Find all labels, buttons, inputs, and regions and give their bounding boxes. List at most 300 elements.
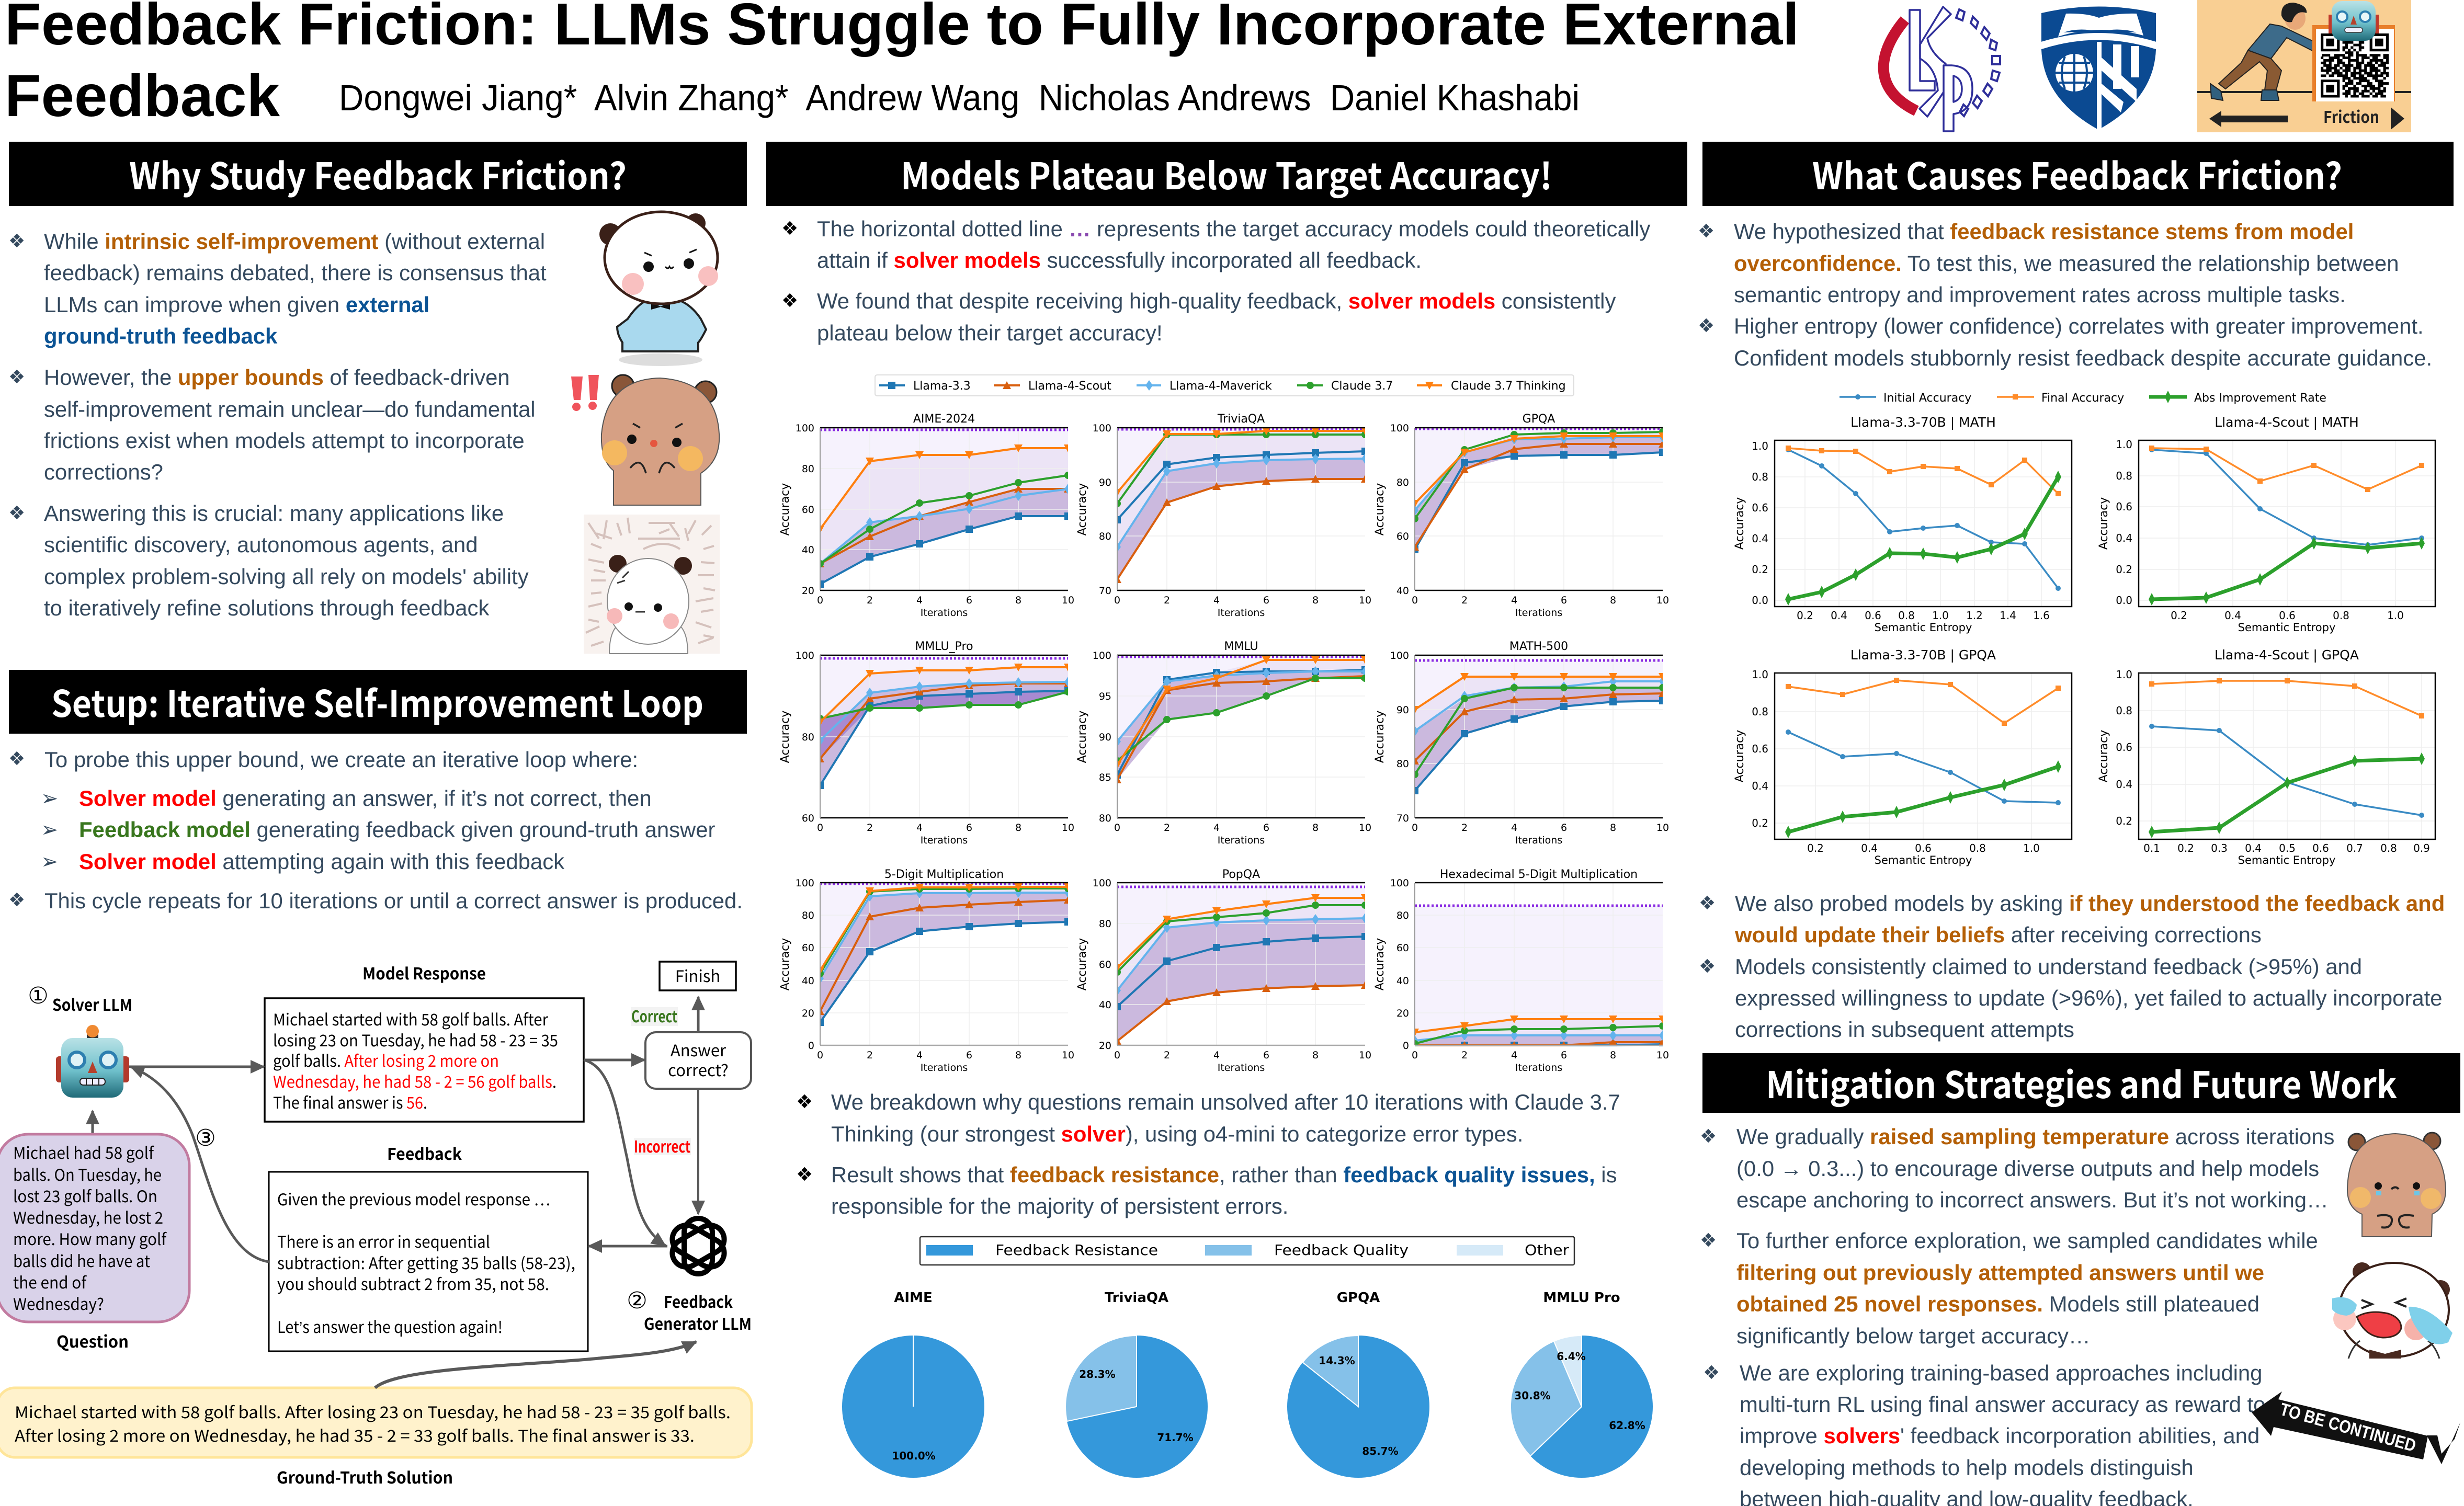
label: feedback: Feedback (387, 1141, 462, 1165)
chart: MMLU_Pro: 100 (796, 650, 814, 661)
chart: Hexadecimal 5-Digit Multiplication: Accuracy (1373, 938, 1387, 990)
chart: Llama-4-Scout MATH: 0.2 (2171, 609, 2187, 622)
chart: MMLU_Pro: MMLU_Pro (915, 640, 973, 653)
text block: semantic entropy and improvement rates across multiple tasks. (1734, 282, 2346, 307)
chart: 5-Digit Multiplication: Accuracy (779, 938, 792, 990)
text block (8, 747, 743, 913)
chart: AIME-2024: 6 (966, 595, 972, 606)
box: finish: Finish (675, 963, 720, 987)
text block: ❖ (8, 889, 25, 911)
chart: Llama-3.3-70B GPQA: 0.8 (1969, 842, 1986, 854)
text block: ❖ (8, 367, 25, 388)
chart: Llama-3.3-70B MATH: Semantic Entropy (1875, 621, 1972, 634)
title: Feedback (5, 63, 280, 129)
chart: Llama-4-Scout GPQA: 0.8 (2380, 842, 2397, 854)
authors: Dongwei Jiang* Alvin Zhang* Andrew Wang Nicholas Andrews Daniel Khashabi (339, 77, 1580, 118)
chart: Llama-3.3-70B MATH: 0.6 (1865, 609, 1881, 622)
arrow: solver to response (129, 1066, 264, 1068)
chart: 5-Digit Multiplication: 10 (1062, 1049, 1074, 1061)
chart: Llama-3.3-70B MATH: Accuracy (1733, 497, 1746, 550)
chart: TriviaQA: TriviaQA (1217, 413, 1265, 426)
pie: TriviaQA: TriviaQA (1105, 1290, 1168, 1306)
text block: ❖ (781, 290, 798, 312)
pie: MMLU Pro: 6.4% (1557, 1350, 1586, 1363)
chart: TriviaQA: 2 (1164, 595, 1170, 606)
chart: MMLU_Pro: 10 (1062, 822, 1074, 834)
pie: MMLU Pro (1511, 1290, 1653, 1478)
box: ground-truth: After losing 2 more on Wednesday, he had 35 - 2 = 33 golf balls. The final answer is 33. (15, 1423, 695, 1446)
arrow: friction right (2391, 107, 2404, 130)
label: feedback generator LLM: Generator LLM (644, 1311, 752, 1334)
chart: PopQA: 8 (1312, 1049, 1319, 1061)
chart: Llama-3.3-70B MATH: 0.6 (1752, 501, 1768, 514)
chart: PopQA (1076, 868, 1371, 1074)
chart: Llama-3.3-70B MATH: 0.4 (1752, 532, 1768, 545)
chart legend: entropy (1840, 392, 2326, 405)
box: feedback: Let’s answer the question again! (277, 1314, 503, 1338)
chart: MMLU_Pro: 6 (966, 822, 972, 834)
chart: Llama-3.3-70B MATH: 0.8 (1898, 609, 1915, 622)
chart: Llama-4-Scout GPQA: 0.4 (2116, 778, 2132, 791)
chart: Llama-4-Scout GPQA: 0.5 (2279, 842, 2296, 854)
chart: TriviaQA: Iterations (1218, 607, 1265, 619)
chart: Llama-3.3-70B MATH: 0.2 (1797, 609, 1813, 622)
chart: Llama-4-Scout GPQA: 0.2 (2177, 842, 2194, 854)
chart: GPQA: Iterations (1515, 607, 1562, 619)
chart: MMLU_Pro: 4 (916, 822, 923, 834)
box: question: balls did he have at (13, 1248, 150, 1272)
text block: understanding probe: ❖ (1699, 893, 1716, 914)
box: model response: Wednesday, he had 58 - 2 = 56 golf balls. (273, 1069, 557, 1092)
chart: AIME-2024: AIME-2024 (913, 413, 975, 426)
box: feedback (269, 1172, 588, 1351)
chart legend: Claude 3.7 (1331, 380, 1393, 393)
panel: mitigation strategies and future work (1700, 1053, 2460, 1506)
box: model response: Michael started with 58 golf balls. After (273, 1007, 549, 1030)
chart: 5-Digit Multiplication: 40 (802, 975, 814, 987)
label: ground-truth solution: Ground-Truth Solution (277, 1465, 453, 1488)
chart legend: entropy: Abs Improvement Rate (2194, 392, 2326, 405)
text block (781, 216, 1650, 345)
chart: PopQA: 6 (1263, 1049, 1269, 1061)
chart: Llama-4-Scout GPQA: 0.1 (2143, 842, 2160, 854)
chart: 5-Digit Multiplication: 2 (867, 1049, 873, 1061)
chart: GPQA: 6 (1561, 595, 1567, 606)
chart: Llama-3.3-70B MATH: Llama-3.3-70B | MATH (1850, 415, 1996, 430)
text block: Solver model attempting again with this feedback (79, 849, 564, 874)
chart: Llama-4-Scout MATH: 1.0 (2116, 438, 2132, 451)
label: incorrect: Incorrect (634, 1134, 690, 1157)
text block (1698, 219, 2432, 370)
chart: Llama-4-Scout MATH: 0.0 (2116, 594, 2132, 607)
chart: AIME-2024: 40 (802, 544, 814, 556)
text block: While intrinsic self-improvement (without external (44, 229, 545, 254)
panel: setup iterative self-improvement loop (0, 670, 752, 1488)
chart: GPQA: 8 (1610, 595, 1616, 606)
arrow: generator to feedback (588, 1245, 667, 1248)
icon: panda in blue dress (599, 212, 718, 366)
chart: Hexadecimal 5-Digit Multiplication: Iterations (1515, 1062, 1562, 1074)
chart: MMLU: 0 (1114, 822, 1120, 834)
icon: friction QR tile (2197, 0, 2411, 132)
chart: Llama-3.3-70B MATH: 0.2 (1752, 563, 1768, 576)
text block: ❖ (1698, 315, 1714, 337)
chart: Llama-4-Scout MATH: 1.0 (2387, 609, 2404, 622)
chart: MMLU: MMLU (1224, 640, 1258, 653)
box: question: more. How many golf (13, 1226, 167, 1250)
pie: MMLU Pro: 30.8% (1514, 1389, 1551, 1402)
icon: solver robot (56, 1025, 129, 1098)
text block: error breakdown: Thinking (our strongest solver), using o4-mini to categorize error types. (831, 1122, 1523, 1146)
text block: error breakdown: ❖ (796, 1164, 813, 1185)
text block: We found that despite receiving high-quality feedback, solver models consistently (817, 289, 1616, 313)
pie: MMLU Pro: 62.8% (1609, 1419, 1645, 1432)
chart: GPQA: Accuracy (1373, 483, 1387, 535)
chart: TriviaQA: 100 (1093, 423, 1111, 434)
chart: AIME-2024: 2 (867, 595, 873, 606)
chart: GPQA: 2 (1461, 595, 1468, 606)
diagram: iterative loop (0, 961, 752, 1488)
text block: understanding probe: corrections in subsequent attempts (1735, 1017, 2074, 1042)
chart: Hexadecimal 5-Digit Multiplication: 8 (1610, 1049, 1616, 1061)
text block: escape anchoring to incorrect answers. But it’s not working… (1736, 1188, 2329, 1212)
chart: GPQA: 4 (1511, 595, 1517, 606)
chart: Hexadecimal 5-Digit Multiplication: 0 (1412, 1049, 1418, 1061)
chart: MMLU: 95 (1099, 691, 1111, 702)
text block: feedback) remains debated, there is consensus that (44, 260, 547, 285)
text block: ❖ (8, 748, 25, 770)
heading: What Causes Feedback Friction? (1812, 147, 2342, 200)
text block: corrections? (44, 460, 163, 484)
box: model response (265, 998, 584, 1122)
chart: Hexadecimal 5-Digit Multiplication: 40 (1396, 975, 1409, 987)
chart: Llama-3.3-70B MATH: 0.8 (1752, 471, 1768, 483)
heading (1702, 142, 2454, 206)
chart: 5-Digit Multiplication (779, 868, 1074, 1074)
text block: (0.0 → 0.3...) to encourage diverse outputs and help models (1736, 1156, 2319, 1181)
text block: ❖ (1698, 221, 1714, 242)
pie: TriviaQA: 28.3% (1079, 1368, 1116, 1380)
title (5, 0, 1799, 129)
chart: TriviaQA: Accuracy (1076, 483, 1089, 535)
chart: MMLU: Iterations (1218, 835, 1265, 846)
box: ground-truth (0, 1388, 752, 1457)
pie: TriviaQA (1065, 1290, 1208, 1478)
chart: Llama-3.3-70B GPQA: Accuracy (1733, 730, 1746, 782)
chart: Llama-4-Scout GPQA: Semantic Entropy (2238, 854, 2335, 866)
text block: to iteratively refine solutions through feedback (44, 596, 489, 620)
chart: Hexadecimal 5-Digit Multiplication: 80 (1396, 910, 1409, 921)
chart: PopQA: 40 (1099, 999, 1111, 1011)
chart: Llama-4-Scout GPQA: 0.9 (2413, 842, 2430, 854)
chart: TriviaQA: 10 (1359, 595, 1371, 606)
heading: Why Study Feedback Friction? (129, 147, 627, 200)
chart: Llama-3.3-70B GPQA: 0.4 (1752, 780, 1768, 792)
chart: MMLU_Pro (779, 640, 1074, 846)
chart: 5-Digit Multiplication: 6 (966, 1049, 972, 1061)
label: solver LLM: ① (28, 983, 49, 1009)
icon: crying bear (2347, 1133, 2446, 1237)
label: correct: Correct (631, 1003, 677, 1027)
heading (766, 142, 1687, 206)
text block: Feedback model generating feedback given ground-truth answer (79, 817, 716, 842)
chart: TriviaQA: 8 (1312, 595, 1319, 606)
text block: ❖ (1700, 1126, 1717, 1147)
chart: Llama-3.3-70B MATH: 1.0 (1752, 440, 1768, 452)
chart: Llama-4-Scout GPQA: 0.4 (2245, 842, 2262, 854)
chart: MMLU: 80 (1099, 813, 1111, 824)
chart: Llama-4-Scout MATH: 0.8 (2116, 470, 2132, 482)
box: question (0, 1134, 189, 1322)
text block: scientific discovery, autonomous agents, and (44, 532, 478, 557)
box: finish (660, 962, 736, 990)
box: answer correct: Answer (671, 1037, 726, 1061)
chart legend: Llama-4-Maverick (1169, 380, 1272, 393)
box: feedback: There is an error in sequential (277, 1229, 490, 1252)
chart legend: Llama-3.3 (913, 380, 971, 393)
chart: MATH-500: 80 (1396, 758, 1409, 770)
arrow: ground truth to generator (375, 1342, 696, 1388)
text block: Confident models stubbornly resist feedback despite accurate guidance. (1734, 346, 2432, 370)
text block: understanding probe: ❖ (1699, 956, 1716, 977)
pie legend: Feedback Quality (1274, 1241, 1409, 1259)
chart: Llama-3.3-70B GPQA: 0.6 (1752, 743, 1768, 755)
text block: LLMs can improve when given external (44, 292, 429, 317)
chart: PopQA: 20 (1099, 1040, 1111, 1052)
text block: error breakdown: We breakdown why questions remain unsolved after 10 iterations with Claude 3.7 (831, 1090, 1620, 1114)
chart: MMLU: 100 (1093, 650, 1111, 661)
text block: ❖ (781, 218, 798, 239)
chart: PopQA: 10 (1359, 1049, 1371, 1061)
text block: error breakdown: Result shows that feedback resistance, rather than feedback quality issues, is (831, 1162, 1617, 1187)
chart: MMLU: 6 (1263, 822, 1269, 834)
text block: This cycle repeats for 10 iterations or until a correct answer is produced. (44, 888, 743, 913)
chart: Llama-4-Scout GPQA: 0.2 (2116, 815, 2132, 827)
text block: complex problem-solving all rely on models' ability (44, 564, 529, 589)
text block: obtained 25 novel responses. Models still plateaued (1736, 1292, 2259, 1316)
chart: MATH-500: Iterations (1515, 835, 1562, 846)
text block: Answering this is crucial: many applications like (44, 501, 504, 526)
chart: TriviaQA: 0 (1114, 595, 1120, 606)
chart legend: Llama-4-Scout (1028, 380, 1111, 393)
chart: PopQA: 60 (1099, 959, 1111, 971)
chart: PopQA: Iterations (1218, 1062, 1265, 1074)
pie: GPQA: 14.3% (1319, 1354, 1355, 1367)
pie: AIME: AIME (894, 1290, 933, 1306)
text block: understanding probe: We also probed models by asking if they understood the feedback and (1735, 891, 2445, 916)
chart: Llama-3.3-70B GPQA: 1.0 (2023, 842, 2040, 854)
chart: 5-Digit Multiplication: 8 (1015, 1049, 1021, 1061)
chart: Llama-3.3-70B MATH (1733, 415, 2072, 634)
text block: plateau below their target accuracy! (817, 321, 1163, 345)
chart: 5-Digit Multiplication: 60 (802, 942, 814, 954)
box: feedback: you should subtract 2 from 35, not 58. (277, 1271, 549, 1295)
box: question: balls. On Tuesday, he (13, 1162, 162, 1185)
chart: MATH-500: Accuracy (1373, 711, 1387, 763)
chart: Llama-3.3-70B GPQA: 1.0 (1752, 668, 1768, 681)
text block: improve solvers' feedback incorporation abilities, and (1740, 1423, 2259, 1448)
chart: Llama-4-Scout MATH: Semantic Entropy (2238, 621, 2335, 634)
icon: QR code (2321, 33, 2389, 97)
icon: to be continued arrow: TO BE CONTINUED (2278, 1399, 2418, 1456)
panel: why study feedback friction (8, 142, 747, 654)
chart: TriviaQA: 6 (1263, 595, 1269, 606)
chart: AIME-2024: 100 (796, 423, 814, 434)
text block: filtering out previously attempted answers until we (1736, 1260, 2264, 1285)
chart: MMLU_Pro: 8 (1015, 822, 1021, 834)
text block: However, the upper bounds of feedback-driven (44, 365, 510, 390)
label: solver LLM (28, 983, 132, 1016)
chart: MMLU_Pro: Accuracy (779, 711, 792, 763)
icon: university shield (2041, 6, 2156, 130)
text block: ➢ (41, 786, 59, 811)
panel: models plateau below target accuracy (766, 142, 1687, 1478)
chart: AIME-2024: 80 (802, 463, 814, 475)
chart: Llama-3.3-70B GPQA: 0.4 (1861, 842, 1878, 854)
chart: MMLU_Pro: 2 (867, 822, 873, 834)
heading (9, 142, 747, 206)
chart: GPQA: GPQA (1523, 413, 1555, 426)
chart: Llama-3.3-70B MATH: 1.2 (1966, 609, 1983, 622)
chart: PopQA: 80 (1099, 918, 1111, 930)
chart: MATH-500: 8 (1610, 822, 1616, 834)
chart: Llama-4-Scout MATH: 0.6 (2116, 500, 2132, 513)
chart: TriviaQA: 90 (1099, 477, 1111, 488)
chart: AIME-2024: Iterations (921, 607, 968, 619)
pie legend (920, 1237, 1574, 1265)
chart: PopQA: 0 (1114, 1049, 1120, 1061)
chart: Llama-3.3-70B GPQA: Llama-3.3-70B | GPQA (1850, 647, 1996, 663)
chart: AIME-2024: Accuracy (779, 483, 792, 535)
icon: LKP logo (1883, 7, 2000, 131)
chart: Hexadecimal 5-Digit Multiplication: 4 (1511, 1049, 1517, 1061)
chart: Llama-4-Scout GPQA: Accuracy (2097, 730, 2110, 782)
chart: MMLU_Pro: 0 (817, 822, 823, 834)
chart: TriviaQA: 4 (1213, 595, 1220, 606)
chart: Llama-3.3-70B GPQA (1733, 647, 2072, 866)
chart: PopQA: Accuracy (1076, 938, 1089, 990)
chart: Llama-3.3-70B GPQA: Semantic Entropy (1875, 854, 1972, 866)
chart: Llama-4-Scout GPQA: 0.6 (2116, 741, 2132, 754)
chart legend (875, 375, 1574, 396)
chart: MMLU: 85 (1099, 772, 1111, 783)
box: question: lost 23 golf balls. On (13, 1183, 157, 1207)
icon: surprised bear (571, 375, 719, 505)
chart: PopQA: 2 (1164, 1049, 1170, 1061)
chart: Llama-3.3-70B GPQA: 0.8 (1752, 705, 1768, 718)
chart: Llama-3.3-70B MATH: 0.4 (1831, 609, 1847, 622)
chart: MMLU: 2 (1164, 822, 1170, 834)
chart: AIME-2024: 8 (1015, 595, 1021, 606)
chart: 5-Digit Multiplication: 80 (802, 910, 814, 921)
chart: GPQA: 0 (1412, 595, 1418, 606)
label: model response: Model Response (362, 961, 486, 984)
text block: overconfidence. To test this, we measured the relationship between (1734, 251, 2399, 276)
chart: MMLU: 90 (1099, 732, 1111, 743)
chart: GPQA: 10 (1656, 595, 1669, 606)
box: model response: golf balls. After losing 2 more on (273, 1048, 499, 1071)
chart: Llama-4-Scout MATH: 0.4 (2224, 609, 2241, 622)
chart: MMLU_Pro: 80 (802, 732, 814, 743)
text block: Solver model generating an answer, if it’s not correct, then (79, 786, 652, 811)
chart: Llama-4-Scout MATH: 0.4 (2116, 532, 2132, 544)
chart: Hexadecimal 5-Digit Multiplication: 0 (1403, 1040, 1409, 1052)
chart: Llama-4-Scout MATH: 0.2 (2116, 563, 2132, 576)
pie: GPQA: GPQA (1337, 1290, 1380, 1306)
arrow: response to answer (584, 1058, 645, 1062)
chart: Llama-4-Scout MATH: 0.8 (2333, 609, 2349, 622)
icon: crying panda (2332, 1262, 2452, 1359)
chart: Llama-4-Scout MATH: Llama-4-Scout | MATH (2215, 415, 2359, 430)
chart: Llama-3.3-70B MATH: 1.4 (2000, 609, 2016, 622)
text block: Higher entropy (lower confidence) correlates with greater improvement. (1734, 314, 2424, 338)
label: step 3: ③ (195, 1125, 216, 1151)
box: question: Wednesday, he lost 2 (13, 1205, 163, 1228)
chart: AIME-2024: 4 (916, 595, 923, 606)
box: answer correct: correct? (668, 1057, 729, 1081)
text block: ➢ (41, 850, 59, 874)
chart: PopQA: 4 (1213, 1049, 1220, 1061)
chart: AIME-2024: 10 (1062, 595, 1074, 606)
chart: 5-Digit Multiplication: 100 (796, 877, 814, 889)
chart: Hexadecimal 5-Digit Multiplication: 2 (1461, 1049, 1468, 1061)
chart: Hexadecimal 5-Digit Multiplication (1373, 868, 1669, 1074)
chart: 5-Digit Multiplication: 20 (802, 1008, 814, 1019)
chart: MATH-500: 0 (1412, 822, 1418, 834)
text block: frictions exist when models attempt to incorporate (44, 428, 525, 453)
text block: self-improvement remain unclear—do fundamental (44, 397, 536, 421)
chart: TriviaQA (1076, 413, 1371, 619)
chart: Llama-4-Scout GPQA: 0.7 (2346, 842, 2363, 854)
chart: TriviaQA: 80 (1099, 531, 1111, 542)
chart: GPQA: 80 (1396, 477, 1409, 488)
chart: Hexadecimal 5-Digit Multiplication: 6 (1561, 1049, 1567, 1061)
chart: MATH-500 (1373, 640, 1669, 846)
chart: Llama-3.3-70B GPQA: 0.6 (1915, 842, 1932, 854)
text block: ❖ (1700, 1230, 1717, 1251)
chart: MMLU_Pro: 60 (802, 813, 814, 824)
text block: ground-truth feedback (44, 324, 278, 348)
pie legend: Other (1525, 1241, 1570, 1259)
chart: Llama-3.3-70B GPQA: 0.2 (1752, 817, 1768, 829)
chart: 5-Digit Multiplication: 0 (808, 1040, 814, 1052)
text block (1700, 1124, 2334, 1506)
chart: Hexadecimal 5-Digit Multiplication: 20 (1396, 1008, 1409, 1019)
text block: We are exploring training-based approaches including (1740, 1361, 2262, 1385)
chart: MMLU: 10 (1359, 822, 1371, 834)
box: ground-truth: Michael started with 58 golf balls. After losing 23 on Tuesday, he had 58 - 23 = 35 golf balls. (15, 1399, 731, 1423)
chart: Llama-4-Scout GPQA (2097, 647, 2435, 866)
text block: ➢ (41, 818, 59, 842)
chart: MATH-500: 10 (1656, 822, 1669, 834)
chart: TriviaQA: 70 (1099, 585, 1111, 597)
pie: AIME: 100.0% (892, 1450, 936, 1462)
chart: Hexadecimal 5-Digit Multiplication: Hexadecimal 5-Digit Multiplication (1440, 868, 1638, 881)
chart: MMLU: 8 (1312, 822, 1319, 834)
chart: AIME-2024 (779, 413, 1074, 619)
chart: Llama-4-Scout GPQA: 0.8 (2116, 704, 2132, 717)
chart: Llama-4-Scout GPQA: 1.0 (2116, 668, 2132, 681)
box: question: Michael had 58 golf (13, 1140, 155, 1163)
chart: MATH-500: 2 (1461, 822, 1468, 834)
chart: Llama-4-Scout GPQA: Llama-4-Scout | GPQA (2215, 647, 2359, 663)
label: feedback generator LLM (627, 1287, 752, 1334)
chart: PopQA: 100 (1093, 877, 1111, 889)
chart: Llama-4-Scout MATH: Accuracy (2097, 497, 2110, 550)
text block: ❖ (8, 503, 25, 524)
text block: We gradually raised sampling temperature across iterations (1736, 1124, 2334, 1149)
chart: Llama-3.3-70B GPQA: 0.2 (1807, 842, 1824, 854)
